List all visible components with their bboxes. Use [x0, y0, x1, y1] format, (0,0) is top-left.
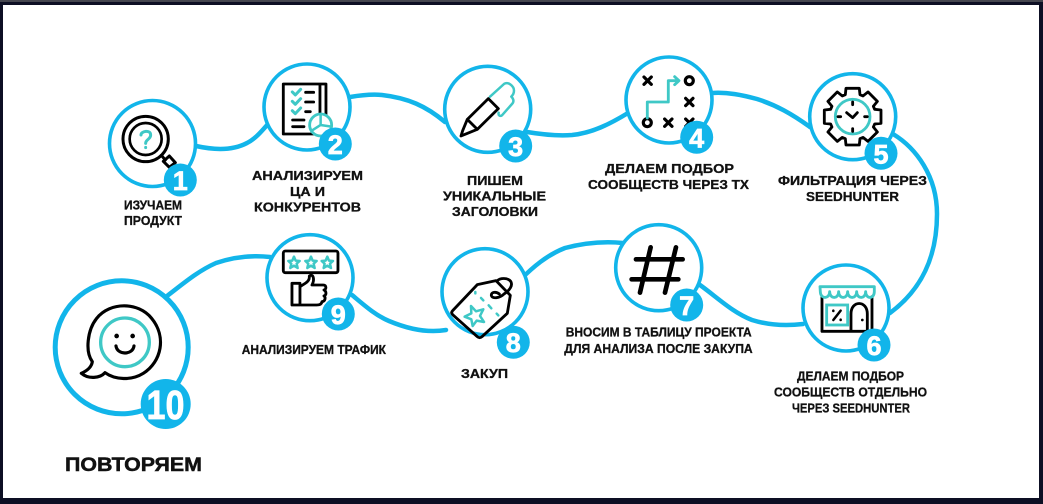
- step 8: purchase: [442, 249, 530, 381]
- label: step 3: УНИКАЛЬНЫЕ: [443, 189, 546, 204]
- label: step 6: ЧЕРЕЗ SEEDHUNTER: [792, 401, 911, 416]
- step 4: select communities: [588, 57, 749, 192]
- label: step 1: [124, 198, 182, 228]
- label: step 3: ЗАГОЛОВКИ: [452, 204, 538, 219]
- label: step 2: [252, 168, 363, 214]
- icon: checklist with pie: [283, 84, 332, 136]
- label: step 5: ФИЛЬТРАЦИЯ ЧЕРЕЗ: [778, 173, 927, 188]
- icon: gear with clock: [824, 88, 881, 145]
- icon: magnifier: [123, 116, 175, 167]
- step 1: study the product: 1: [173, 166, 188, 196]
- step 8: purchase: 8: [506, 328, 521, 358]
- icon: tactics board: [643, 77, 693, 127]
- step 6: select communities via SeedHunter: [774, 265, 927, 416]
- label: step 3: [443, 173, 546, 219]
- step 9: analyse traffic: [242, 235, 386, 357]
- step 3: write headlines: [443, 66, 546, 219]
- icon: storefront: [820, 287, 874, 331]
- icon: pen: [461, 83, 514, 136]
- step 10: repeat: 10: [146, 382, 184, 428]
- label: step 6: ДЕЛАЕМ ПОДБОР: [797, 369, 904, 384]
- label: step 5: [778, 173, 927, 204]
- step 4: select communities: 4: [689, 123, 704, 153]
- label: step 9: АНАЛИЗИРУЕМ ТРАФИК: [242, 342, 386, 357]
- step 10: repeat: [55, 281, 202, 476]
- label: step 6: СООБЩЕСТВ ОТДЕЛЬНО: [774, 385, 927, 400]
- label: step 3: ПИШЕМ: [467, 173, 523, 188]
- step 2: analyse audience and competitors: [252, 64, 363, 214]
- step 7: enter into table: 7: [679, 291, 694, 321]
- label: step 5: SEEDHUNTER: [806, 189, 900, 204]
- label: step 4: [588, 161, 749, 192]
- label: step 1: ПРОДУКТ: [124, 213, 182, 228]
- label: step 7: ДЛЯ АНАЛИЗА ПОСЛЕ ЗАКУПА: [564, 341, 753, 356]
- step 2: analyse audience and competitors: 2: [328, 130, 343, 160]
- step 3: write headlines: 3: [508, 132, 523, 162]
- label: step 7: ВНОСИМ В ТАБЛИЦУ ПРОЕКТА: [566, 325, 752, 340]
- label: step 8: ЗАКУП: [461, 366, 508, 381]
- connecting path: [167, 93, 937, 331]
- step 9: analyse traffic: 9: [331, 300, 346, 330]
- icon: price tag: [452, 278, 512, 338]
- step 1: study the product: [110, 100, 197, 228]
- icon: hash: [632, 247, 683, 293]
- label: step 4: ДЕЛАЕМ ПОДБОР: [605, 161, 734, 176]
- label: step 2: КОНКУРЕНТОВ: [254, 200, 361, 214]
- label: step 4: СООБЩЕСТВ ЧЕРЕЗ ТХ: [588, 177, 749, 192]
- label: step 2: АНАЛИЗИРУЕМ: [252, 168, 363, 183]
- icon: rating thumbs up: [283, 251, 338, 305]
- label: step 2: ЦА И: [290, 184, 325, 199]
- icon: smiling chat bubble: [81, 306, 160, 378]
- label: step 1: ИЗУЧАЕМ: [124, 198, 182, 212]
- label: step 6: [774, 369, 927, 416]
- step 5: filtering: 5: [873, 139, 889, 169]
- step 6: select communities via SeedHunter: 6: [866, 331, 882, 361]
- heading: repeat: ПОВТОРЯЕМ: [65, 454, 202, 476]
- step 7: enter into table: [564, 225, 753, 356]
- label: step 7: [564, 325, 753, 356]
- step 5: filtering: [778, 74, 927, 204]
